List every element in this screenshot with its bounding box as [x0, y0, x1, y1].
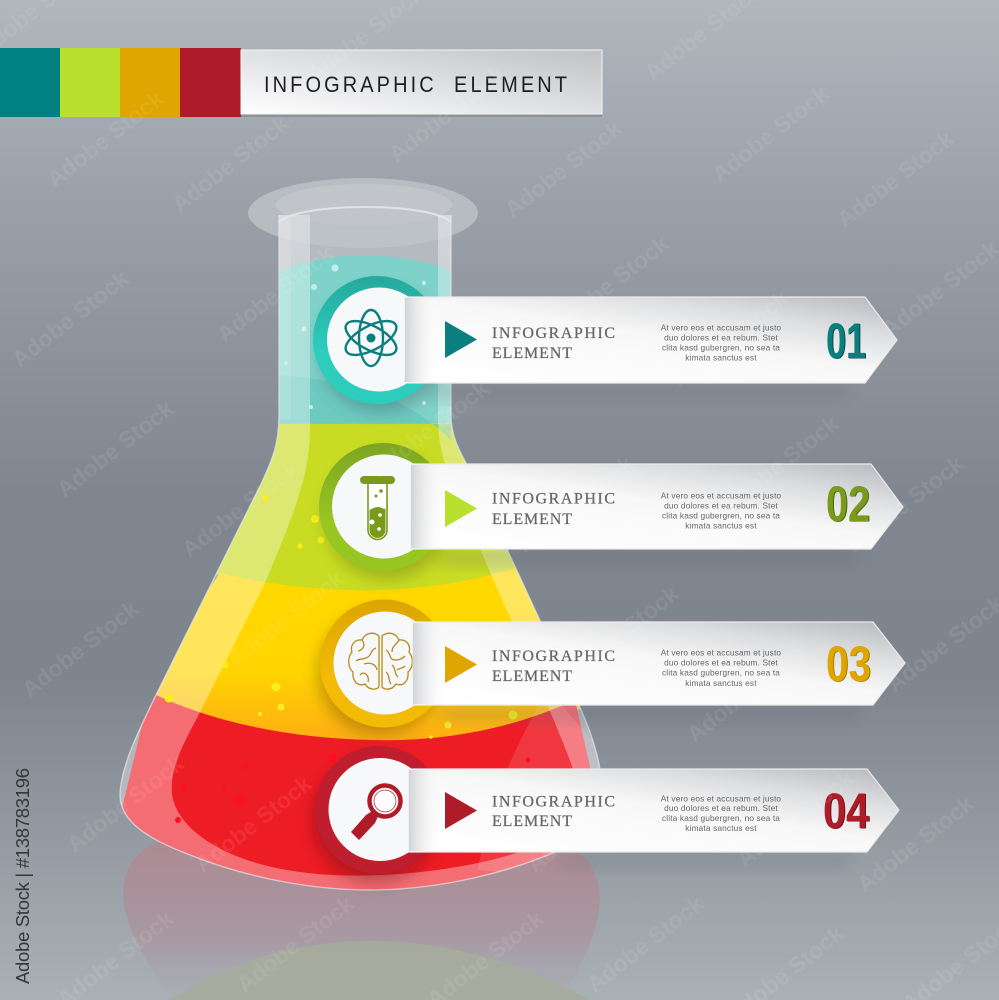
teal liquid layer	[279, 256, 451, 424]
circle badge	[319, 443, 449, 579]
circle badge	[313, 746, 443, 882]
description	[661, 322, 781, 362]
watermarks: Adobe Stock	[212, 240, 339, 347]
bubbles	[284, 264, 426, 409]
arrow banner	[411, 464, 903, 549]
description: duo dolores et ea rebum. Stet	[664, 332, 778, 342]
number: 04	[823, 783, 869, 839]
heading: ELEMENT	[492, 345, 572, 362]
watermarks: Adobe Stock	[62, 750, 189, 857]
description: At vero eos et accusam et justo	[661, 322, 781, 332]
arrow	[445, 490, 477, 527]
description: kimata sanctus est	[685, 352, 757, 362]
watermarks: Adobe Stock	[384, 60, 511, 167]
description: clita kasd gubergren, no sea ta	[662, 668, 780, 678]
watermarks: Adobe Stock	[732, 765, 859, 872]
heading	[492, 490, 615, 528]
watermarks: Adobe Stock	[582, 890, 709, 997]
description: duo dolores et ea rebum. Stet	[664, 658, 778, 668]
arrow banner	[413, 622, 905, 705]
watermarks: Adobe Stock	[52, 395, 179, 502]
yellow liquid layer	[140, 566, 590, 741]
heading: ELEMENT	[492, 511, 572, 528]
title block	[0, 48, 602, 117]
watermarks: Adobe Stock	[7, 265, 134, 372]
banner shadow	[430, 384, 850, 398]
description: kimata sanctus est	[685, 678, 757, 688]
title: INFOGRAPHIC ELEMENT	[264, 73, 567, 97]
stock id label: Adobe Stock | #138783196	[12, 768, 33, 984]
watermarks: Adobe Stock	[512, 450, 639, 557]
heading: INFOGRAPHIC	[492, 325, 615, 342]
watermarks: Adobe Stock	[500, 115, 627, 222]
description: clita kasd gubergren, no sea ta	[662, 813, 780, 823]
flask reflection	[123, 842, 600, 1000]
watermarks: Adobe Stock	[167, 110, 294, 217]
title bar	[241, 50, 602, 114]
watermarks: Adobe Stock	[667, 285, 794, 392]
description: At vero eos et accusam et justo	[661, 648, 781, 658]
lime liquid layer	[200, 423, 530, 590]
watermarks: Adobe Stock	[367, 375, 494, 482]
flask	[119, 178, 600, 891]
banner shadow	[440, 550, 860, 564]
heading	[492, 325, 615, 362]
number: 04	[824, 784, 870, 840]
arrow banner	[405, 297, 897, 383]
circle badge	[313, 276, 443, 412]
step 4	[313, 746, 899, 882]
watermarks: Adobe Stock	[222, 565, 349, 672]
step 3	[318, 600, 905, 735]
watermarks: Adobe Stock	[717, 410, 844, 517]
description: clita kasd gubergren, no sea ta	[662, 342, 780, 352]
circle badge	[318, 600, 448, 735]
watermarks: Adobe Stock	[547, 230, 674, 337]
banner shadow	[440, 706, 860, 720]
flask outline	[120, 215, 600, 890]
watermarks: Adobe Stock	[177, 455, 304, 562]
arrow banner	[409, 769, 899, 852]
watermarks: Adobe Stock	[557, 580, 684, 687]
neck glass	[280, 236, 450, 272]
description: duo dolores et ea rebum. Stet	[664, 500, 778, 510]
icon: atom	[341, 310, 401, 366]
watermarks: Adobe Stock	[42, 85, 169, 192]
arrow	[445, 321, 477, 358]
description: kimata sanctus est	[685, 823, 757, 833]
heading: ELEMENT	[492, 668, 572, 685]
number: 01	[827, 314, 867, 370]
watermarks: Adobe Stock	[522, 770, 649, 877]
heading	[492, 648, 615, 685]
description	[661, 648, 781, 688]
heading: INFOGRAPHIC	[492, 794, 615, 810]
icon: test tube	[360, 476, 395, 540]
watermarks: Adobe Stock	[852, 790, 979, 897]
icon: magnifier	[351, 786, 400, 840]
flask rim	[248, 178, 478, 248]
red liquid layer	[122, 695, 590, 890]
glass rim highlight	[120, 215, 600, 890]
number: 02	[826, 476, 870, 532]
description	[661, 794, 781, 833]
number: 02	[827, 476, 871, 532]
watermarks: Adobe Stock	[832, 125, 959, 232]
step 2	[319, 443, 903, 579]
watermarks: Adobe Stock	[682, 640, 809, 747]
description: kimata sanctus est	[685, 520, 757, 530]
description: clita kasd gubergren, no sea ta	[662, 510, 780, 520]
watermarks: Adobe Stock	[842, 450, 969, 557]
icon: brain	[349, 633, 412, 689]
heading: ELEMENT	[492, 813, 572, 830]
arrow	[445, 792, 477, 829]
number: 01	[826, 313, 866, 369]
number: 03	[827, 636, 872, 692]
watermarks: Adobe Stock	[707, 80, 834, 187]
description: At vero eos et accusam et justo	[661, 794, 781, 804]
watermarks: Adobe Stock	[17, 595, 144, 702]
heading: INFOGRAPHIC	[492, 648, 615, 665]
title bar shadow	[241, 114, 602, 117]
description: At vero eos et accusam et justo	[661, 490, 781, 500]
watermarks: Adobe Stock	[232, 890, 359, 997]
number: 03	[826, 636, 871, 692]
colour swatches	[0, 48, 241, 117]
heading: INFOGRAPHIC	[492, 490, 615, 508]
watermarks: Adobe Stock	[190, 770, 317, 877]
arrow	[445, 646, 477, 683]
heading	[492, 794, 615, 830]
banner shadow	[560, 853, 850, 867]
description	[661, 490, 781, 530]
step 1	[313, 276, 897, 412]
description: duo dolores et ea rebum. Stet	[664, 803, 778, 813]
